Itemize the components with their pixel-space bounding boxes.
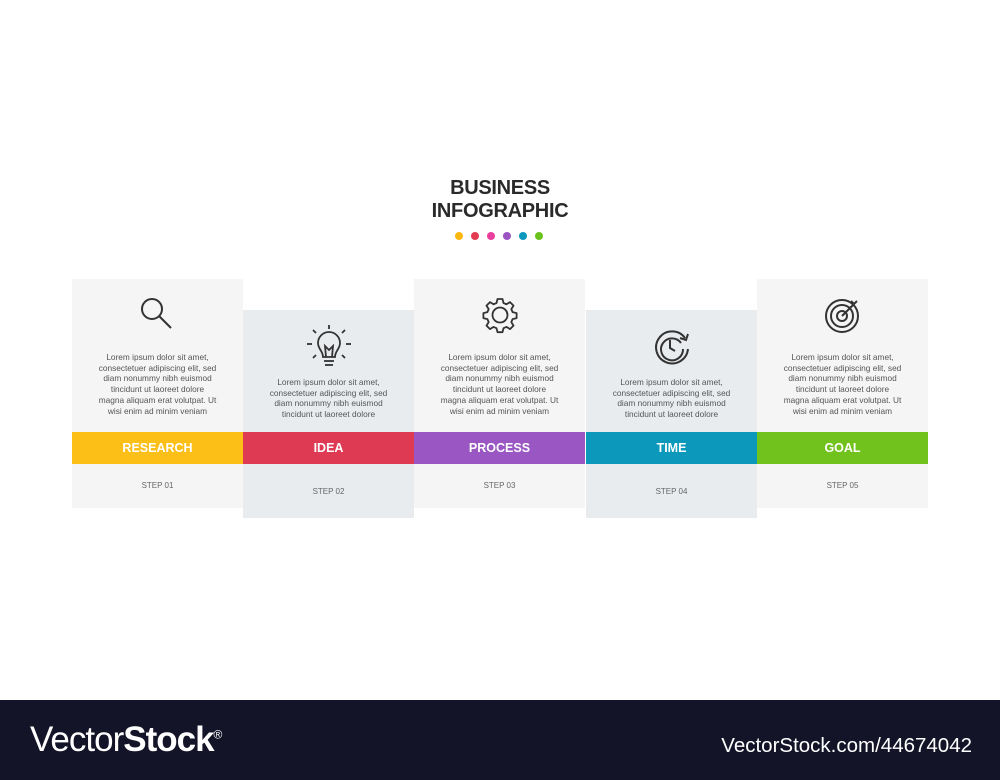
text: idea: tincidunt ut laoreet dolore: [282, 409, 375, 419]
text: research: wisi enim ad minim veniam: [108, 406, 207, 416]
footer url: VectorStock.com/44674042: [721, 734, 972, 757]
label bar: research: RESEARCH: [122, 441, 193, 455]
text: process: diam nonummy nibh euismod: [445, 373, 554, 383]
step 04: STEP 04: [656, 487, 687, 496]
text: idea: [270, 377, 387, 419]
text: process: tincidunt ut laoreet dolore: [453, 384, 546, 394]
step 03: STEP 03: [484, 481, 515, 490]
text: research: Lorem ipsum dolor sit amet,: [106, 352, 209, 362]
text: research: magna aliquam erat volutpat. Ut: [99, 395, 216, 405]
panel: idea: [243, 310, 414, 518]
text: research: consectetuer adipiscing elit, sed: [99, 363, 216, 373]
text: time: diam nonummy nibh euismod: [617, 398, 726, 408]
text: process: [441, 352, 558, 416]
icon: target: [825, 299, 859, 333]
label bar: time: TIME: [657, 441, 686, 455]
text: goal: Lorem ipsum dolor sit amet,: [791, 352, 894, 362]
text: time: [613, 377, 730, 419]
icon: magnifier: [141, 298, 172, 329]
label bar: goal: GOAL: [824, 441, 861, 455]
text: process: Lorem ipsum dolor sit amet,: [448, 352, 551, 362]
text: goal: diam nonummy nibh euismod: [788, 373, 897, 383]
text: idea: consectetuer adipiscing elit, sed: [270, 388, 387, 398]
step 05: STEP 05: [827, 481, 858, 490]
icon: light bulb: [307, 325, 351, 366]
label bar: idea: [243, 432, 414, 464]
text: process: consectetuer adipiscing elit, sed: [441, 363, 558, 373]
text: goal: tincidunt ut laoreet dolore: [796, 384, 889, 394]
label bar: time: [586, 432, 757, 464]
step 01: STEP 01: [142, 481, 173, 490]
label bar: goal: [757, 432, 928, 464]
text: goal: wisi enim ad minim veniam: [793, 406, 892, 416]
step 02: STEP 02: [313, 487, 344, 496]
title: [432, 177, 568, 222]
icon: clock refresh: [655, 330, 689, 364]
panel: goal: [757, 279, 928, 508]
text: idea: diam nonummy nibh euismod: [274, 398, 383, 408]
panel: research: [72, 279, 243, 508]
text: process: magna aliquam erat volutpat. Ut: [441, 395, 558, 405]
color dots: [455, 232, 543, 240]
text: time: tincidunt ut laoreet dolore: [625, 409, 718, 419]
title: INFOGRAPHIC: [432, 200, 568, 222]
text: research: diam nonummy nibh euismod: [103, 373, 212, 383]
label bar: research: [72, 432, 243, 464]
icon: gear: [482, 298, 518, 334]
text: time: Lorem ipsum dolor sit amet,: [620, 377, 723, 387]
text: idea: Lorem ipsum dolor sit amet,: [277, 377, 380, 387]
text: time: consectetuer adipiscing elit, sed: [613, 388, 730, 398]
text: research: tincidunt ut laoreet dolore: [111, 384, 204, 394]
label bar: idea: IDEA: [314, 441, 343, 455]
title: BUSINESS: [450, 177, 550, 199]
text: research: [99, 352, 216, 416]
panel: process: [414, 279, 585, 508]
text: goal: [784, 352, 902, 416]
footer band: [0, 700, 1000, 780]
label bar: process: [414, 432, 585, 464]
text: process: wisi enim ad minim veniam: [450, 406, 549, 416]
footer logo: VectorStock®: [30, 720, 221, 759]
panel: time: [586, 310, 757, 518]
label bar: process: PROCESS: [469, 441, 530, 455]
text: goal: magna aliquam erat volutpat. Ut: [784, 395, 901, 405]
text: goal: consectetuer adipiscing elit, sed: [784, 363, 901, 373]
